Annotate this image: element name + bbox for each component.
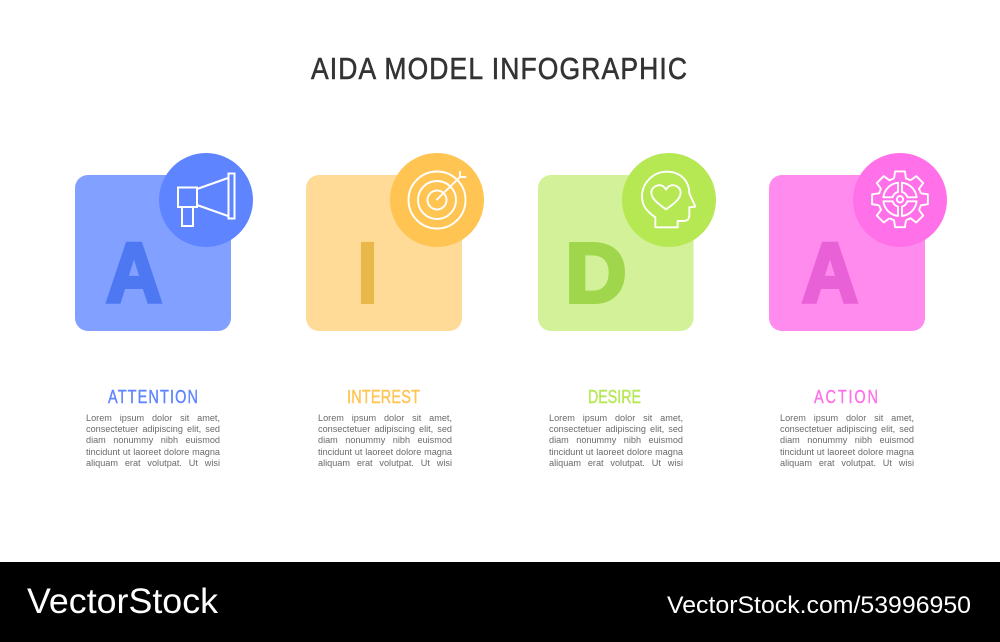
text block: action: Lorem ipsum dolor sit amet, <box>780 413 914 423</box>
text block: attention: consectetuer adipiscing elit, sed <box>86 424 220 434</box>
text block: desire: diam nonummy nibh euismod <box>549 435 683 445</box>
footer bar <box>0 562 1000 642</box>
big letter A: A <box>106 226 162 320</box>
text block: attention: tincidunt ut laoreet dolore magna <box>86 447 220 457</box>
card square: attention <box>75 175 231 331</box>
panel: interest card <box>306 153 484 407</box>
card square: desire <box>538 175 694 331</box>
label: interest: INTEREST <box>347 386 420 407</box>
text block: action: diam nonummy nibh euismod <box>780 435 914 445</box>
icon badge: target <box>390 153 484 247</box>
text block: interest: diam nonummy nibh euismod <box>318 435 452 445</box>
panel: action card <box>769 153 947 407</box>
icon badge: gear <box>853 153 947 247</box>
text block: attention: aliquam erat volutpat. Ut wisi <box>86 458 220 468</box>
text block: action: tincidunt ut laoreet dolore magna <box>780 447 914 457</box>
text block: interest: consectetuer adipiscing elit, sed <box>318 424 452 434</box>
icon badge: head with heart <box>622 153 716 247</box>
text block: desire <box>549 413 683 468</box>
title: AIDA MODEL INFOGRAPHIC <box>311 52 687 86</box>
card square: action <box>769 175 925 331</box>
text block: interest: Lorem ipsum dolor sit amet, <box>318 413 452 423</box>
text block: interest: aliquam erat volutpat. Ut wisi <box>318 458 452 468</box>
label: attention: ATTENTION <box>108 386 198 407</box>
text block: desire: tincidunt ut laoreet dolore magna <box>549 447 683 457</box>
text block: interest: tincidunt ut laoreet dolore magna <box>318 447 452 457</box>
panel: desire card <box>538 153 716 407</box>
footer image id: VectorStock.com/53996950 <box>667 592 971 619</box>
panel: attention card <box>75 153 253 407</box>
text block: desire: consectetuer adipiscing elit, sed <box>549 424 683 434</box>
text block: attention <box>86 413 220 468</box>
label: desire: DESIRE <box>588 387 641 407</box>
text block: attention: Lorem ipsum dolor sit amet, <box>86 413 220 423</box>
card square: interest <box>306 175 462 331</box>
big letter A: A <box>802 226 858 320</box>
text block: attention: diam nonummy nibh euismod <box>86 435 220 445</box>
text block: action: aliquam erat volutpat. Ut wisi <box>780 458 914 468</box>
text block: interest <box>318 413 452 468</box>
big letter D: D <box>566 226 626 320</box>
text block: action: consectetuer adipiscing elit, sed <box>780 424 914 434</box>
text block: action <box>780 413 914 468</box>
icon badge: megaphone <box>159 153 253 247</box>
footer logo text: VectorStock <box>27 582 219 621</box>
text block: desire: Lorem ipsum dolor sit amet, <box>549 413 683 423</box>
text block: desire: aliquam erat volutpat. Ut wisi <box>549 458 683 468</box>
label: action: ACTION <box>814 386 878 407</box>
big letter I: I <box>358 226 377 320</box>
